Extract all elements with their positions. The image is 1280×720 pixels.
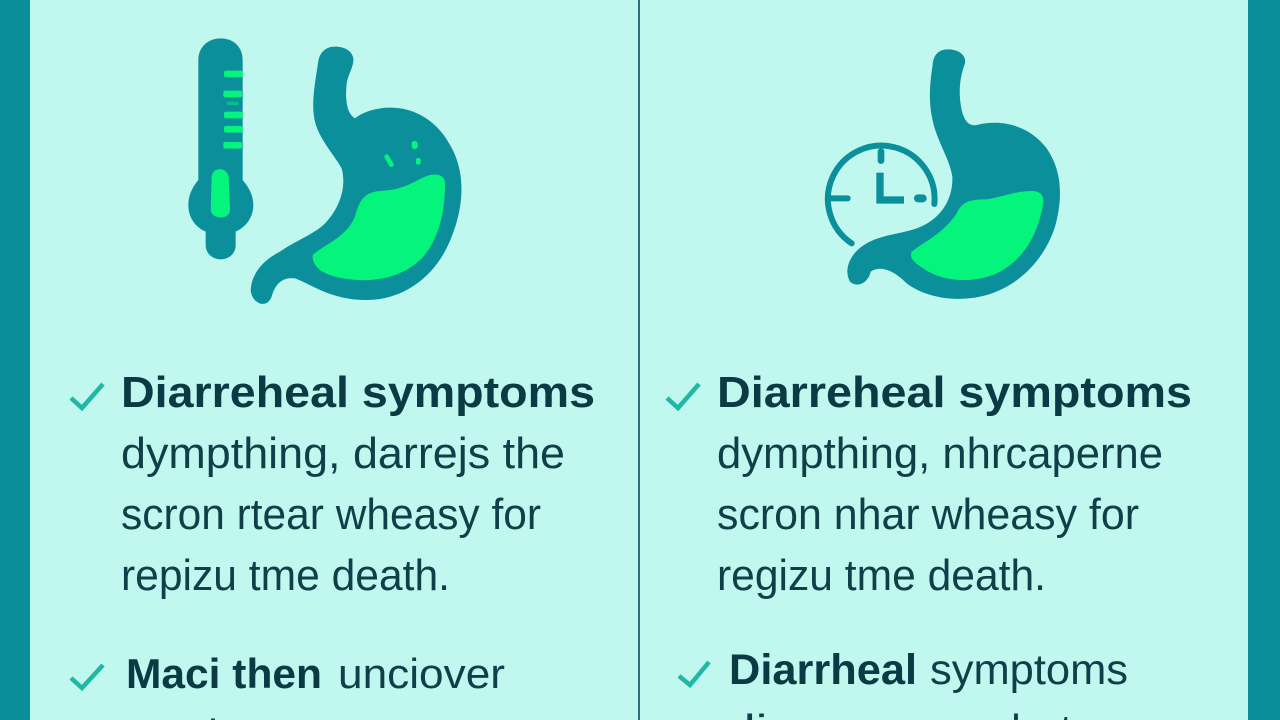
text block: second item: Maci then <box>126 650 322 697</box>
check mark 3 <box>667 384 699 408</box>
text block: fourth item: symptoms <box>930 646 1128 694</box>
text block: second item <box>125 650 505 720</box>
text block: first item: dympthing, darrejs the <box>121 429 565 478</box>
text block: first item: Diarreheal symptoms <box>121 368 595 417</box>
text block: third item: dympthing, nhrcaperne <box>717 429 1163 478</box>
check mark 4 <box>679 662 709 685</box>
icon: stomach with fluid <box>251 47 461 304</box>
icon: clock <box>828 146 935 243</box>
icon: stomach with fluid <box>847 49 1060 299</box>
icon: thermometer <box>188 38 253 259</box>
text block: third item: scron nhar wheasy for <box>717 490 1139 539</box>
panel: right <box>667 49 1192 720</box>
text block: fourth item <box>726 646 1128 720</box>
text block: third item <box>717 368 1192 600</box>
check mark 2 <box>71 665 103 688</box>
text block: first item: repizu tme death. <box>121 551 450 600</box>
panel: left <box>71 38 595 720</box>
text block: first item <box>121 368 595 600</box>
text block: third item: Diarreheal symptoms <box>717 368 1192 417</box>
centre divider <box>638 0 640 720</box>
right edge band <box>1248 0 1280 720</box>
text block: second item: unciover <box>338 650 505 697</box>
check mark 1 <box>71 384 103 408</box>
text block: first item: scron rtear wheasy for <box>121 490 541 539</box>
left edge band <box>0 0 30 720</box>
text block: third item: regizu tme death. <box>717 551 1046 600</box>
text block: fourth item: Diarrheal <box>729 646 917 694</box>
